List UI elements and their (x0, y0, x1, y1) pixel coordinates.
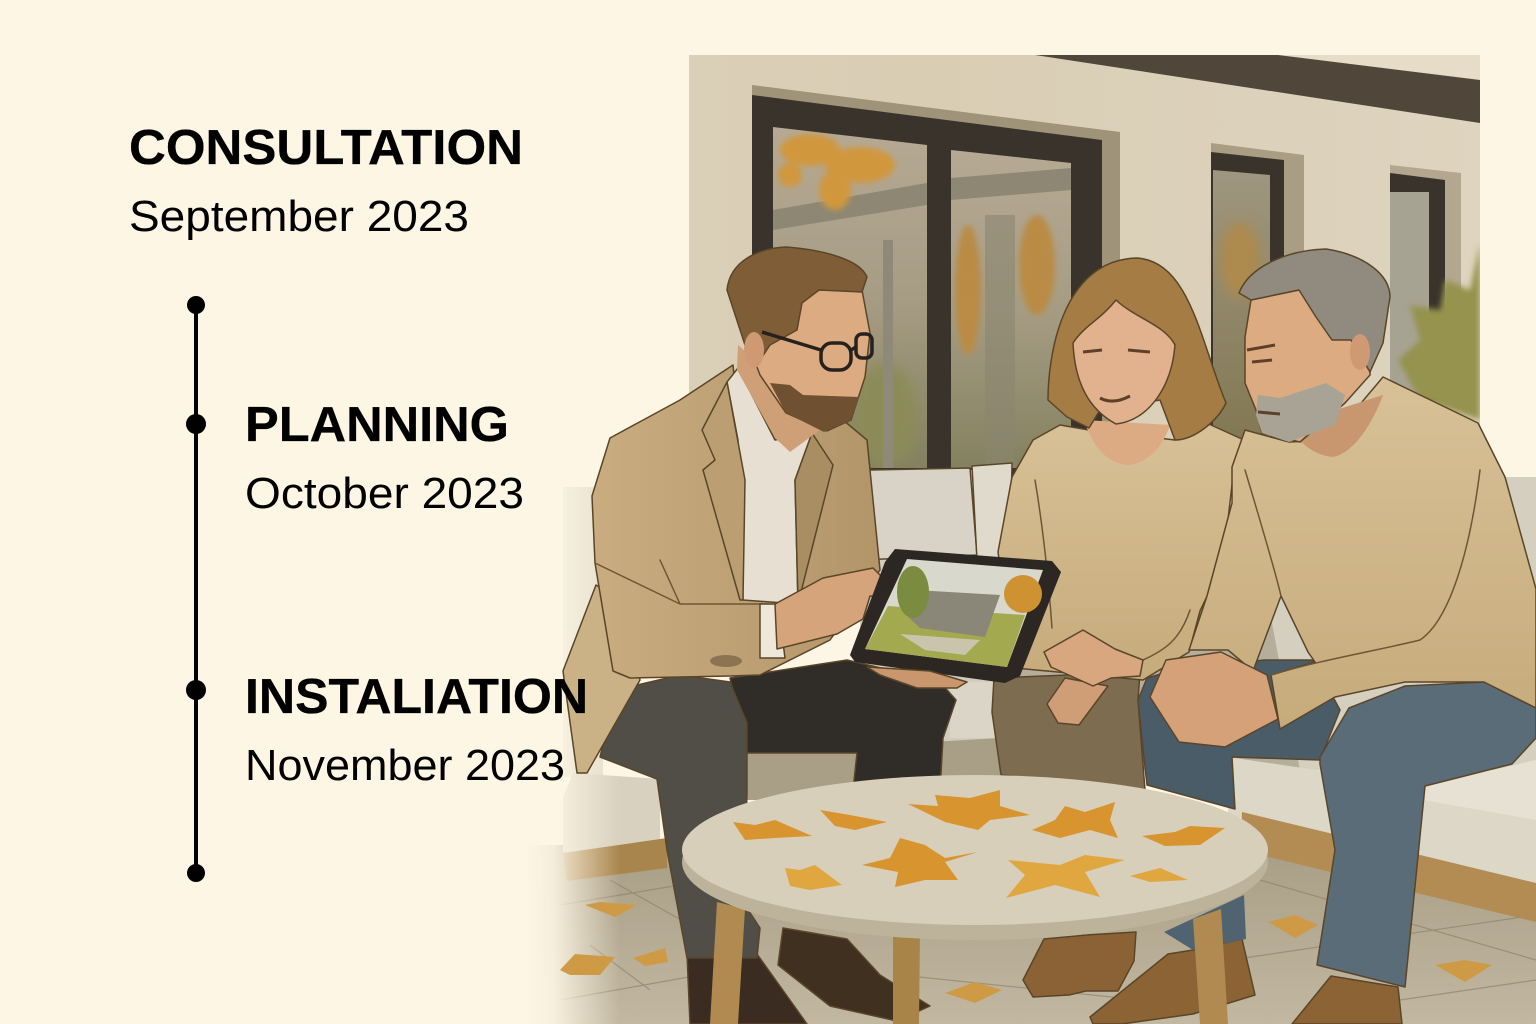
supporting hand (867, 667, 967, 688)
face (1073, 300, 1175, 424)
middle window (1211, 143, 1304, 470)
sweater (998, 420, 1244, 680)
table edge (682, 784, 1268, 940)
head (743, 290, 870, 431)
jeans upper (1138, 660, 1340, 809)
table top (682, 775, 1268, 925)
far shoe (1090, 939, 1255, 1024)
fade of the illustration into the background (525, 480, 620, 1024)
house wall (689, 55, 1480, 495)
beard (1256, 383, 1345, 442)
trousers (992, 672, 1145, 790)
far shoe (778, 928, 930, 1021)
woman (992, 258, 1244, 997)
ear (744, 332, 764, 368)
step: installation: November 2023 (245, 741, 565, 790)
brows and eye (1247, 345, 1280, 414)
sleeve buttons (710, 655, 742, 667)
seat middle (740, 738, 1000, 800)
floor tile lines (560, 880, 1536, 1000)
neck (737, 345, 820, 452)
step: planning: PLANNING (245, 398, 509, 452)
beard (770, 383, 859, 432)
autumn leaves on table (733, 790, 1225, 898)
hair (1048, 258, 1226, 440)
large sliding window (752, 85, 1120, 480)
near shoe (687, 954, 807, 1024)
sweater arm seams (1245, 470, 1480, 675)
step: consultation: CONSULTATION (129, 121, 523, 175)
illustration: consultation on the patio (525, 55, 1536, 1024)
table legs (710, 902, 745, 1024)
lapel left (702, 382, 745, 600)
right man (1090, 249, 1536, 1024)
vertical line (194, 305, 198, 873)
floor (525, 845, 1536, 1024)
leaves on the floor (560, 902, 1492, 1003)
grey hair (1239, 249, 1390, 372)
seat left (563, 773, 660, 858)
top dot (187, 296, 205, 314)
sweater torso (1189, 377, 1536, 729)
hair (727, 247, 867, 360)
far leg under table (1164, 895, 1246, 950)
rail left (563, 838, 667, 881)
bottom dot (187, 864, 205, 882)
planning dot (186, 414, 206, 434)
pointing hand (775, 568, 898, 649)
sweater arm seams (1035, 480, 1190, 660)
far leg (730, 660, 956, 790)
tablet screen (865, 559, 1043, 667)
right window (1390, 165, 1461, 402)
step: installation (245, 670, 588, 790)
jacket body (592, 365, 880, 678)
step: consultation (129, 121, 523, 241)
ear (1350, 334, 1370, 370)
light gap beside the knee (950, 682, 1000, 738)
sofa back and cushions (860, 470, 1000, 760)
shirt (727, 368, 812, 604)
sleeve seam (595, 560, 763, 604)
roof overhang (1035, 55, 1480, 123)
step: consultation: September 2023 (129, 192, 469, 241)
clasped hands (1150, 652, 1278, 747)
shoes (1023, 932, 1136, 997)
glasses (762, 332, 872, 370)
sky corner above the roof (1278, 55, 1480, 80)
sofa (563, 463, 1536, 922)
near leg (600, 675, 760, 958)
sofa back left (563, 487, 603, 777)
left man: advisor (563, 247, 956, 1024)
neck (1084, 420, 1170, 465)
table (682, 775, 1268, 1024)
timeline (186, 296, 206, 882)
jacket tail (563, 585, 640, 773)
step: planning (245, 398, 524, 518)
step: planning: October 2023 (245, 469, 524, 518)
plant (1398, 243, 1480, 420)
rail right (1240, 812, 1536, 922)
seat right (1228, 757, 1536, 885)
installation dot (186, 680, 206, 700)
near shoe (1292, 976, 1402, 1024)
lapel right (795, 433, 833, 604)
face features (1083, 350, 1150, 401)
neck (1289, 395, 1383, 457)
upper hand (1044, 630, 1143, 686)
lower hand (1047, 678, 1108, 725)
face (1245, 290, 1370, 442)
near leg (1317, 682, 1536, 987)
tablet (850, 549, 1061, 683)
step: installation: INSTALIATION (245, 670, 588, 724)
shirt cuff (760, 604, 785, 658)
